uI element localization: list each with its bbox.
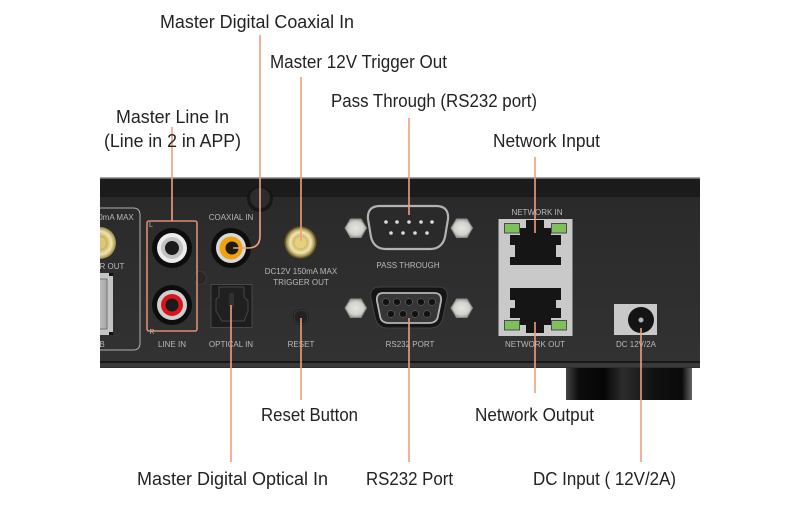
screw behind panel [247, 186, 273, 212]
device port labels: DC12V 150mA MAX [265, 267, 338, 276]
leader: trigger out [300, 77, 302, 241]
device rear panel [100, 177, 700, 368]
device port labels: COAXIAL IN [209, 213, 254, 222]
leader: DC input [640, 328, 642, 462]
device port labels [149, 208, 657, 349]
line in highlight box [147, 221, 197, 331]
label: RS232 Port: RS232 Port [366, 469, 453, 489]
device port labels: PASS THROUGH [376, 261, 440, 270]
red RCA jack [152, 285, 192, 325]
label: Master Line In: (Line in 2 in APP) [104, 131, 241, 151]
device port labels: R [149, 329, 155, 336]
leader: coaxial in [233, 35, 260, 248]
left group cropped by the image edge: R OUT [100, 262, 125, 271]
device port labels: L [149, 222, 153, 229]
device port labels: NETWORK OUT [505, 340, 565, 349]
left group cropped by the image edge: B [99, 340, 105, 349]
leader: network input [534, 157, 536, 233]
network port block [498, 219, 572, 336]
label: Master 12V Trigger Out: Master 12V Trigger Out [270, 52, 447, 72]
device port labels: LINE IN [158, 340, 186, 349]
label: Network Output: Network Output [475, 405, 594, 425]
label: Master Line In [104, 107, 241, 151]
device port labels: TRIGGER OUT [273, 278, 329, 287]
device port labels: RS232 PORT [386, 340, 434, 349]
trigger gold connector [284, 226, 316, 258]
pass through port [368, 206, 448, 249]
device port labels: DC 12V/2A [616, 340, 657, 349]
coaxial jack [211, 228, 251, 268]
hex nuts [345, 219, 472, 318]
label: Pass Through (RS232 port): Pass Through (RS232 port) [331, 91, 537, 111]
small panel screw [194, 272, 206, 284]
reset button [293, 309, 309, 325]
label: DC Input: DC Input ( 12V/2A) [533, 469, 676, 489]
label: Network Input: Network Input [493, 131, 600, 151]
rubber foot [566, 366, 692, 400]
white RCA jack [152, 228, 192, 268]
label: Master Line In: Master Line In [116, 107, 229, 127]
RS232 port [371, 287, 447, 328]
leader: RS232 port [408, 318, 410, 462]
leader: reset button [300, 318, 302, 400]
device port labels: RESET [288, 340, 314, 349]
label: Reset Button: Reset Button [261, 405, 358, 425]
leader: network output [534, 322, 536, 393]
left group cropped by the image edge: 0mA MAX [98, 213, 134, 222]
left group cropped by the image edge [100, 208, 140, 350]
device port labels: OPTICAL IN [209, 340, 253, 349]
leader: optical in [230, 305, 232, 462]
label: Master Digital Coaxial In: Master Digital Coaxial In [160, 12, 354, 32]
leader: pass through [408, 118, 410, 215]
optical port [211, 284, 252, 328]
DC jack [614, 304, 657, 335]
device port labels: NETWORK IN [511, 208, 563, 217]
leader: master line in [171, 127, 173, 221]
label: Master Digital Optical In: Master Digital Optical In [137, 469, 328, 489]
